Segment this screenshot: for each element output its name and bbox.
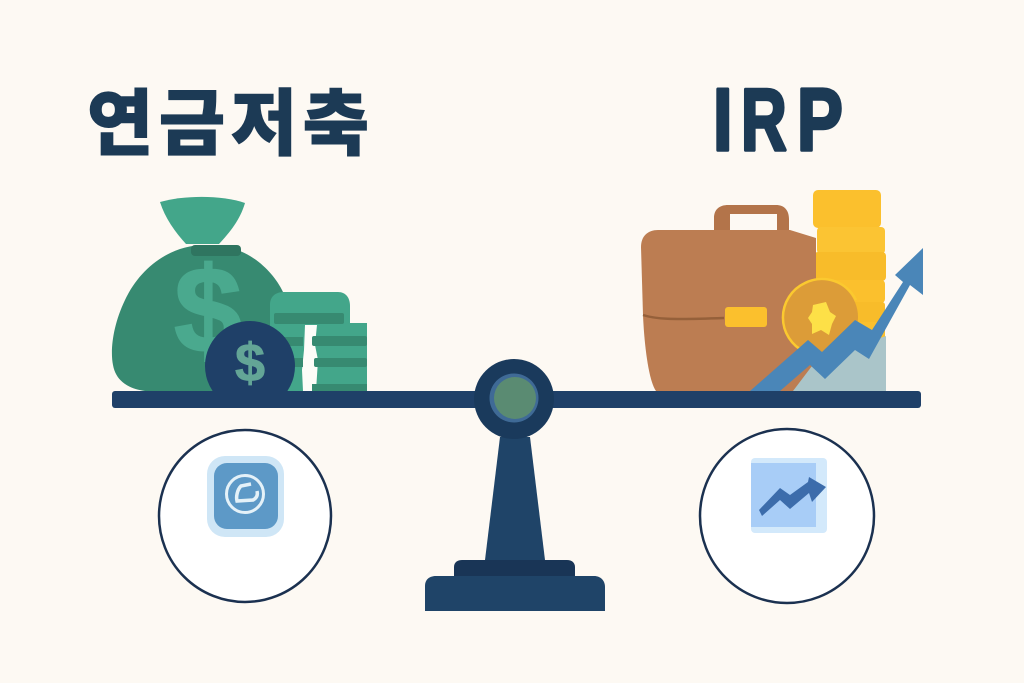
rising arrow: [750, 248, 923, 391]
medallion emblem: [808, 302, 836, 335]
medallion ring: [783, 279, 856, 352]
gold medallion coin: [782, 279, 858, 355]
panel: left circle: [159, 430, 331, 602]
dollar sign on coin: $: [235, 333, 265, 393]
title: IRP: P: [797, 71, 843, 169]
briefcase clasp: [725, 307, 767, 327]
title: IRP: R: [741, 72, 787, 170]
icon: briefcase with gold coins and rising arrow: [641, 190, 923, 391]
scale post: [485, 437, 545, 560]
scale beam: [112, 391, 921, 408]
scale pivot: [474, 359, 554, 439]
coin stack stripes: [274, 313, 344, 324]
title: IRP: I: [713, 70, 733, 169]
title: 연금저축: 연금저축: [87, 85, 369, 165]
icon: money bag with coins: [112, 197, 367, 393]
money bag knot: [160, 197, 245, 244]
money bag shadow: [191, 245, 241, 256]
title: IRP: [713, 70, 843, 170]
front navy coin: [205, 321, 295, 391]
money bag body: [112, 245, 283, 391]
briefcase handle: [714, 205, 789, 232]
icon: pension badge: [207, 456, 284, 537]
coin stack gap: [302, 325, 318, 391]
panel: right circle: [700, 429, 874, 603]
briefcase flap line: [643, 315, 724, 319]
scale base bottom: [425, 576, 605, 611]
silver coin stack: [793, 336, 886, 391]
briefcase body: [641, 230, 816, 391]
icon: growth chart card: [751, 458, 827, 533]
coin stack top: [270, 292, 367, 391]
scale base top: [454, 560, 575, 577]
gold coin stack: [813, 190, 886, 346]
dollar sign on bag: $: [174, 242, 242, 378]
